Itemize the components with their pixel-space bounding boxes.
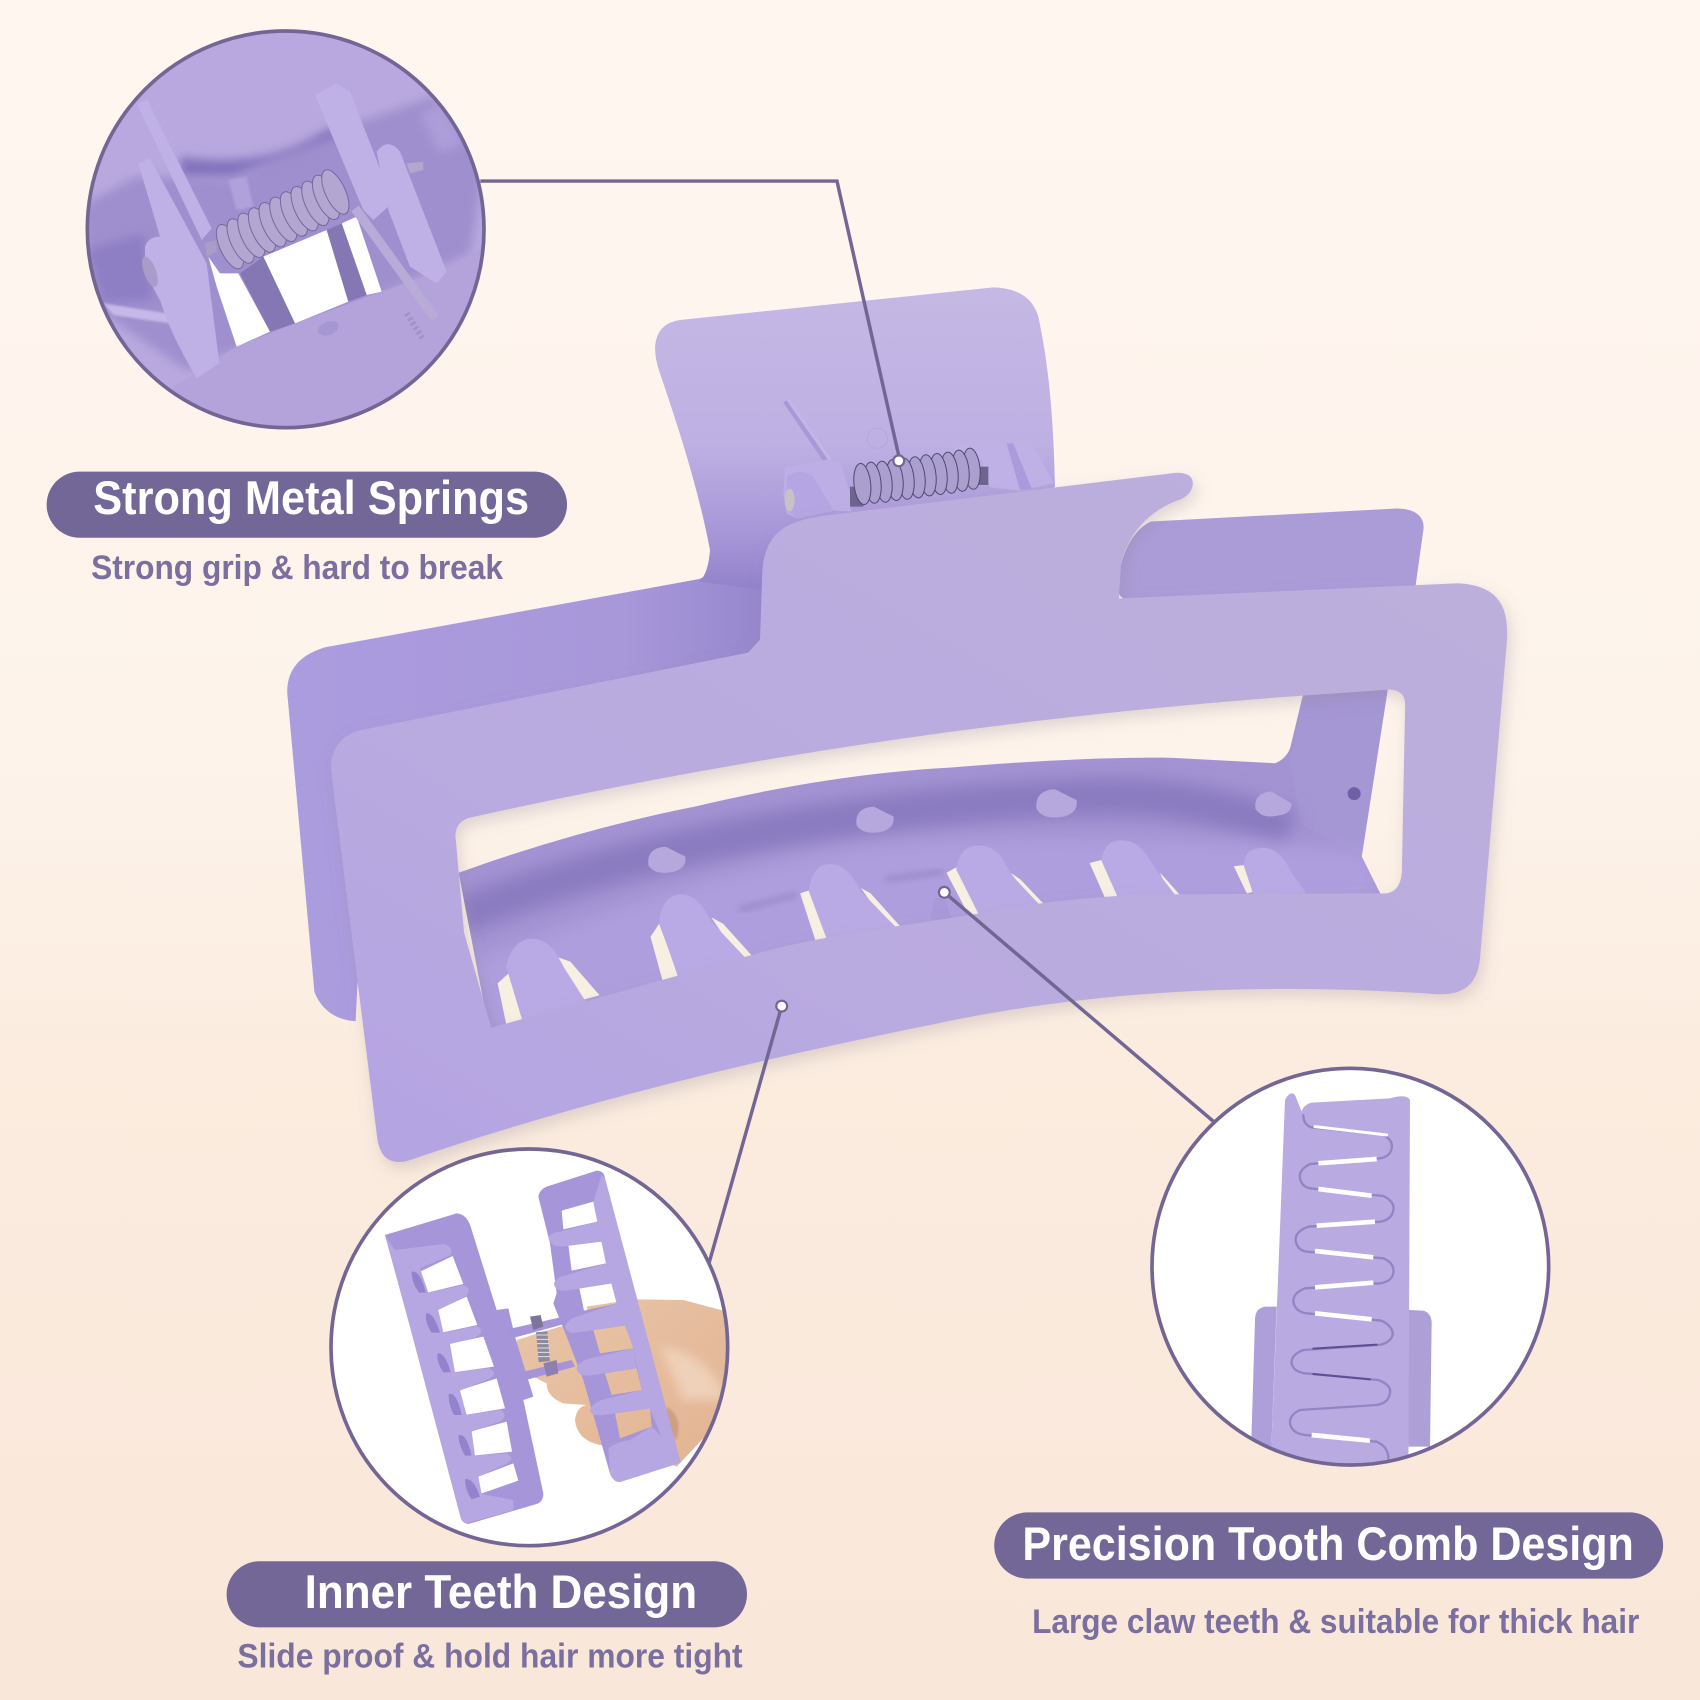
front blade <box>331 473 1507 1162</box>
left comb outer strip and teeth <box>386 1237 513 1523</box>
wire <box>352 206 413 284</box>
comb body <box>1270 1093 1410 1483</box>
ledge shadows <box>739 872 943 910</box>
heading: Inner Teeth Design <box>227 1561 747 1627</box>
connector dots <box>776 455 950 1012</box>
right comb teeth and outer strip <box>548 1175 681 1482</box>
right comb <box>538 1171 681 1482</box>
heading: Strong Metal Springs: Strong Metal Springs <box>93 472 529 525</box>
subtext: Strong grip: Strong grip & hard to break <box>91 549 504 587</box>
lever wire <box>786 401 828 463</box>
right bracket <box>950 440 1054 491</box>
teeth <box>506 840 1306 1021</box>
mini spring bracket <box>513 1315 575 1380</box>
bumps <box>648 789 1291 873</box>
detail circle: precision tooth comb <box>1152 1068 1549 1483</box>
detail circle: inner teeth with hand <box>330 1148 733 1546</box>
connector lines <box>480 181 1214 1263</box>
gaps between teeth <box>498 860 1255 1025</box>
inner claw teeth seen through the window <box>458 690 1388 1028</box>
left comb <box>385 1213 543 1524</box>
hand <box>517 1299 733 1467</box>
heading: Inner Teeth Design: Inner Teeth Design <box>305 1566 697 1619</box>
serpentine slot <box>1290 1115 1394 1458</box>
back blade left body <box>287 542 770 1021</box>
left bracket <box>783 459 851 518</box>
subtext: Slide proof: Slide proof & hold hair more tight <box>237 1637 743 1675</box>
back blade handle and spring (zoom coordinates) <box>655 287 1055 600</box>
main product: claw clip <box>287 181 1507 1263</box>
detail circle: metal spring close-up <box>80 27 497 453</box>
handle <box>655 287 1055 600</box>
subtext: Large claw teeth: Large claw teeth & suitable for thick hair <box>1032 1603 1639 1641</box>
spring coils <box>216 169 350 270</box>
back blade right body <box>1117 508 1424 600</box>
heading: Precision Tooth Comb Design: Precision Tooth Comb Design <box>1022 1518 1634 1571</box>
coils <box>852 447 982 505</box>
plates <box>140 110 446 378</box>
left comb recesses <box>412 1272 480 1499</box>
windows <box>208 217 382 347</box>
base tabs <box>1252 1306 1277 1446</box>
